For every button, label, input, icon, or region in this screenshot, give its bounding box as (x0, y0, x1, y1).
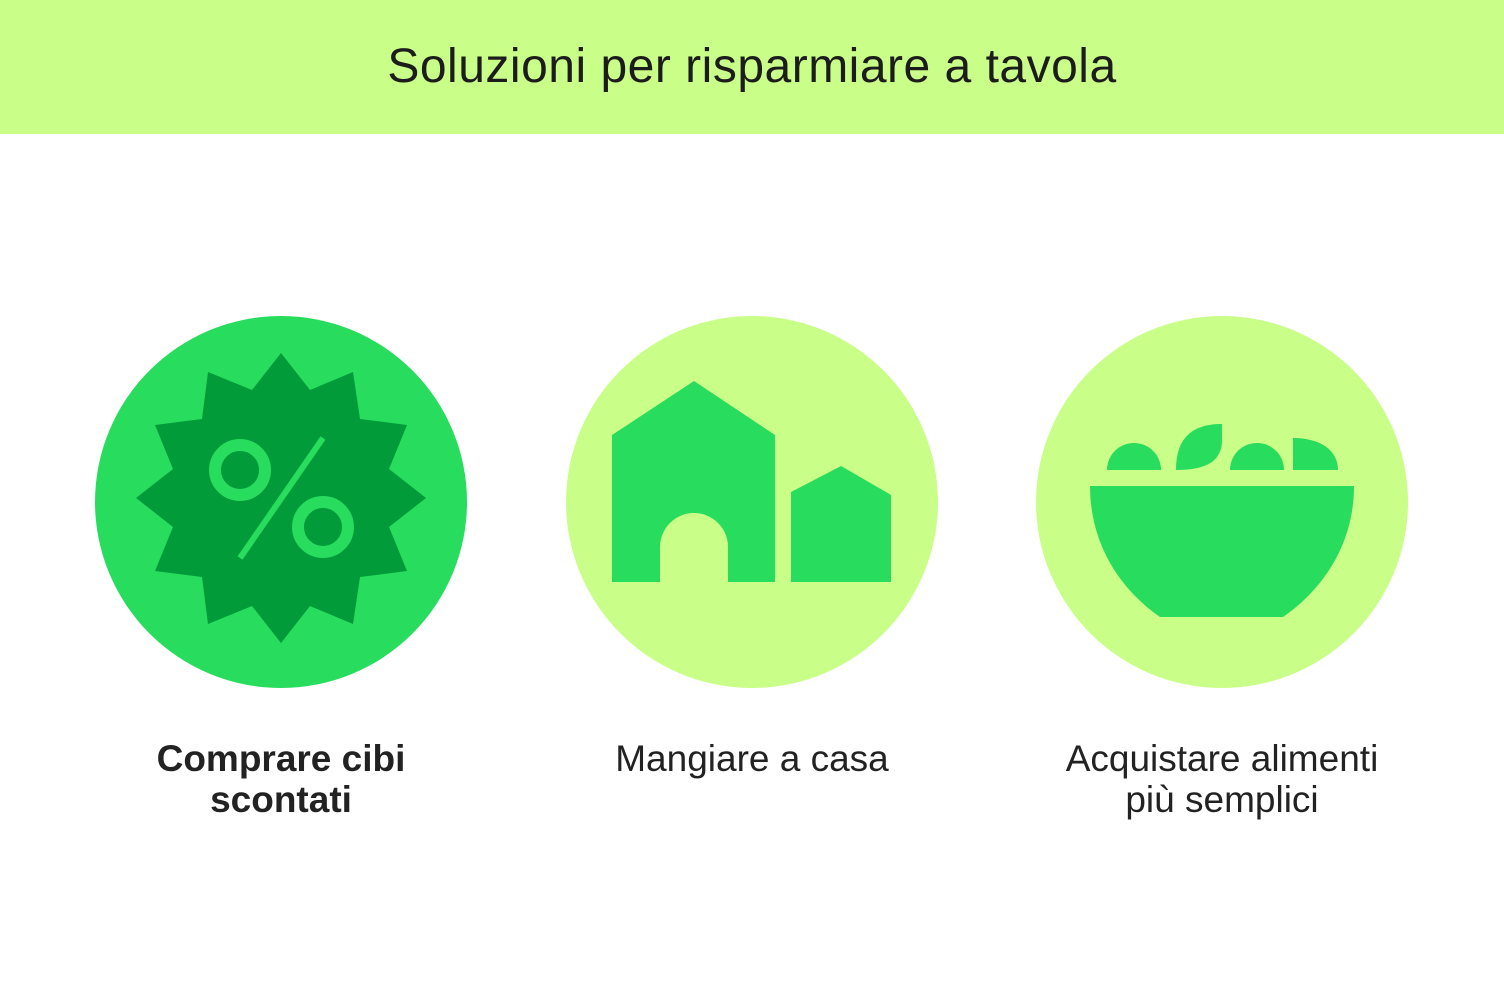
icon: discount badge (95, 316, 467, 688)
label: mangiare a casa: Mangiare a casa (615, 738, 889, 779)
label: comprare cibi scontati: scontati (210, 779, 352, 820)
label: acquistare alimenti più semplici: più semplici (1125, 779, 1319, 820)
title: Soluzioni per risparmiare a tavola (387, 40, 1117, 93)
icon: houses (566, 316, 938, 688)
icon: salad bowl (1036, 316, 1408, 688)
label: acquistare alimenti più semplici (1066, 738, 1378, 820)
label: comprare cibi scontati: Comprare cibi (157, 738, 405, 779)
header band (0, 0, 1504, 134)
label: acquistare alimenti più semplici: Acquistare alimenti (1066, 738, 1378, 779)
label: comprare cibi scontati (157, 738, 405, 820)
